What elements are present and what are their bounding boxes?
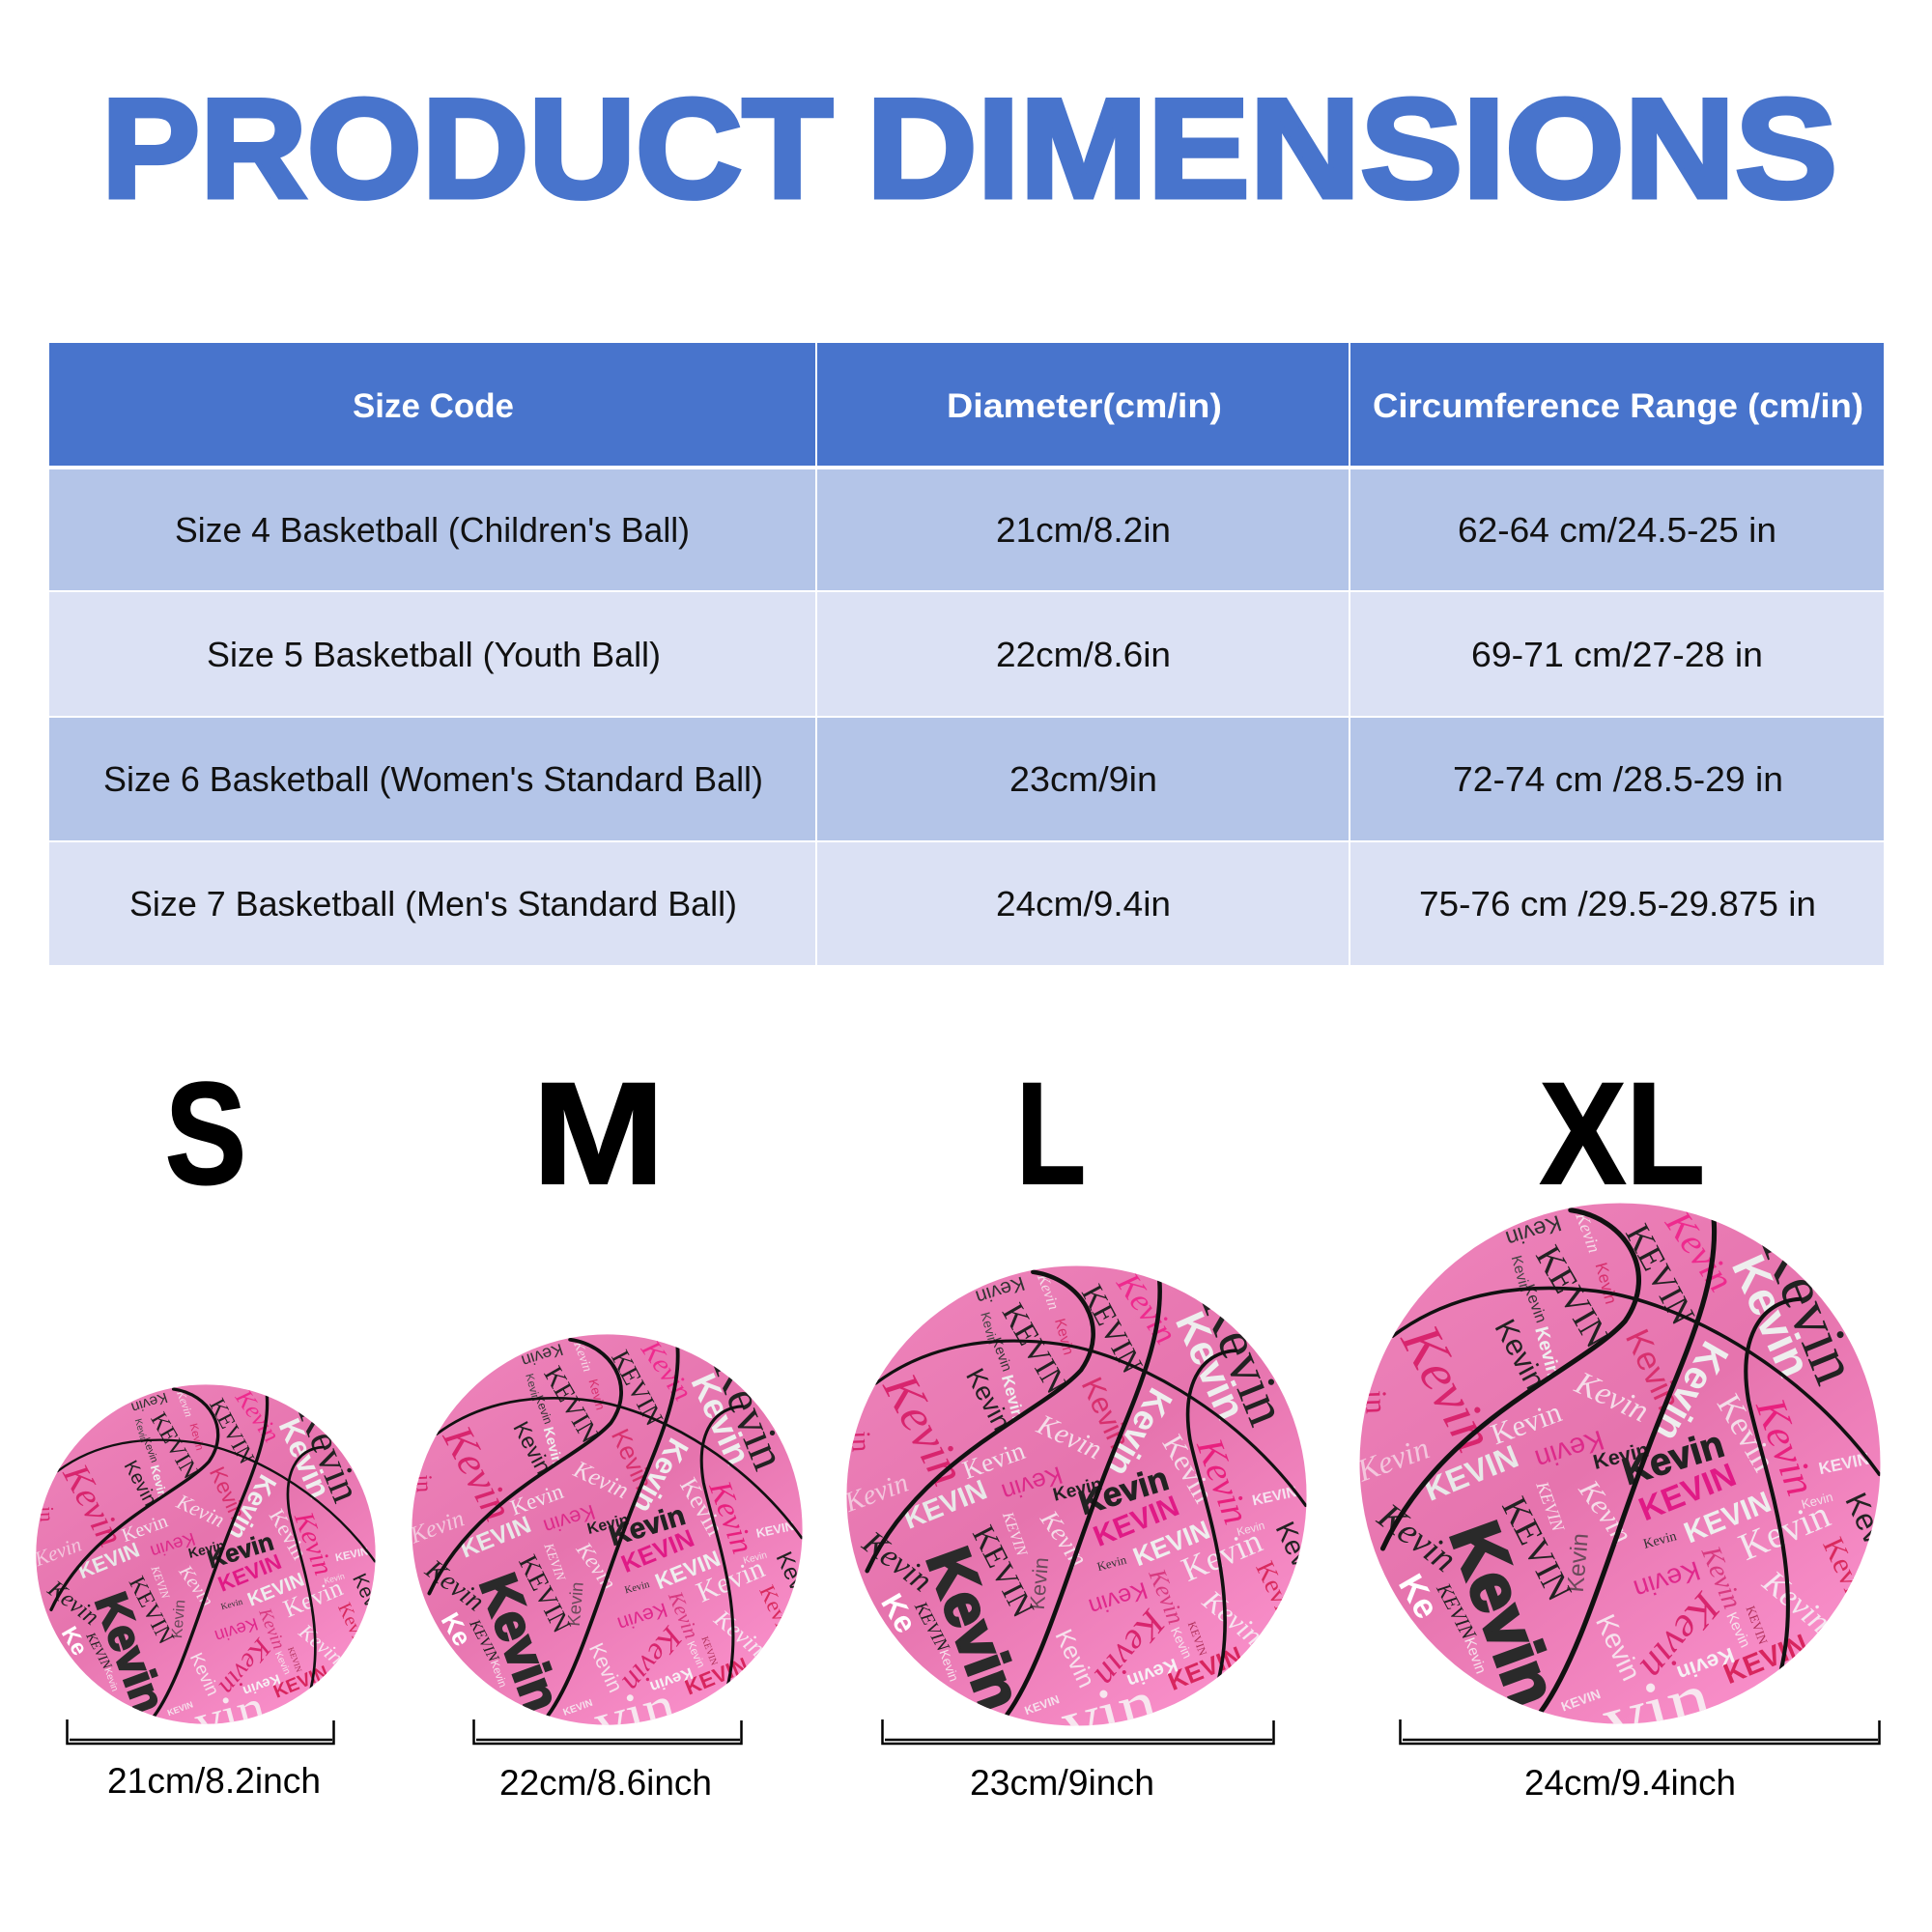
basketball L [846, 1265, 1307, 1725]
basketball L: Kevin [1250, 1557, 1304, 1628]
basketball XL: Kevin [1591, 1438, 1651, 1474]
basketball L: Kevin [1270, 1517, 1325, 1591]
basketball S: Kevin [186, 1537, 226, 1561]
basketball XL: Kevin [1722, 1609, 1753, 1650]
basketball M: Kevin [674, 1473, 729, 1540]
table row: size 4: Size 4 Basketball (Children's Ball) [175, 510, 690, 550]
basketball S: Kevin [333, 1600, 373, 1651]
basketball L: KEVIN [1128, 1514, 1214, 1572]
basketball S: Kevin [132, 1418, 149, 1444]
basketball XL: Kevin [1461, 1635, 1489, 1676]
basketball XL: Kevin [1503, 1210, 1565, 1252]
basketball M: Kevin [626, 1433, 696, 1520]
basketball S: Kevin [348, 1570, 389, 1625]
basketball S: Kevin [31, 1532, 84, 1571]
basketball S: Kevin [86, 1586, 175, 1719]
basketball S: KEVIN [244, 1569, 307, 1611]
dimension bracket S [68, 1719, 334, 1744]
basketball L: KEVIN [899, 1474, 991, 1536]
basketball XL: Kevin [1563, 1532, 1594, 1594]
table header row: Diameter(cm/in) [947, 387, 1222, 425]
basketball S: Kevin [129, 1389, 169, 1416]
basketball XL: Kevin [1747, 1221, 1871, 1393]
basketball L: Kevin [998, 1373, 1028, 1421]
basketball L: Kevin [839, 1467, 912, 1519]
basketball XL: Kevin [1641, 1528, 1678, 1552]
basketball XL: KEVIN [1494, 1491, 1580, 1607]
basketball XL: Kevin [1674, 1643, 1738, 1686]
table row: size 7: 75-76 cm /29.5-29.875 in [1419, 884, 1816, 923]
basketball M: Kevin [692, 1552, 769, 1608]
basketball S: Kevin [241, 1670, 282, 1698]
basketball M: Kevin [541, 1500, 598, 1539]
basketball M: Kevin [708, 1605, 770, 1662]
basketball XL: vin [1593, 1651, 1721, 1769]
basketball M: Kevin [683, 1368, 758, 1471]
basketball S: KEVIN [214, 1549, 285, 1597]
basketball S: KEVIN [148, 1563, 173, 1602]
basketball M: KEVIN [538, 1361, 606, 1448]
basketball S: Kevin [140, 1436, 160, 1464]
basketball S: Kevin [213, 1632, 277, 1701]
basketball S: Kevin [148, 1528, 198, 1561]
basketball L: Kevin [978, 1311, 1000, 1346]
basketball L: Kevin [1032, 1408, 1107, 1465]
basketball L: KEVIN [1023, 1692, 1062, 1718]
basketball S: KEVIN [204, 1395, 259, 1468]
basketball S: KEVIN [74, 1537, 143, 1583]
table row: size 5: 22cm/8.6in [996, 635, 1171, 674]
dimension bracket XL [1401, 1719, 1880, 1744]
basketball S: KEVIN [145, 1408, 203, 1484]
basketball S: Kevin [186, 1422, 205, 1452]
basketball XL: Kevin [1732, 1492, 1836, 1569]
basketball XL: KEVIN [1679, 1485, 1776, 1549]
basketball S: Kevin [272, 1650, 292, 1676]
basketball S [36, 1384, 376, 1724]
basketball XL: Kevin [1721, 1247, 1821, 1385]
basketball M: Kevin [585, 1511, 631, 1538]
basketball M: Kevin [569, 1455, 633, 1504]
basketball XL: Kevin [1572, 1473, 1639, 1549]
basketball M: Kevin [606, 1424, 659, 1493]
basketball XL: Kevin [1710, 1388, 1783, 1478]
basketball M: Kevin [703, 1348, 796, 1477]
size table [49, 343, 1884, 965]
basketball M: KEVIN [681, 1653, 752, 1700]
basketball S: Kevin [101, 1666, 120, 1693]
basketball L: Kevin [1025, 1556, 1053, 1610]
basketball L: KEVIN [999, 1509, 1031, 1559]
basketball M: Kevin [635, 1334, 697, 1406]
size letter XL: XL [1540, 1052, 1705, 1214]
basketball M: vin [587, 1671, 683, 1759]
basketball M: KEVIN [562, 1698, 594, 1719]
basketball L: in [845, 1431, 876, 1453]
basketball L: Kevin [1095, 1552, 1128, 1574]
basketball M [412, 1334, 803, 1725]
dimension label XL: 24cm/9.4inch [1524, 1763, 1736, 1803]
basketball L: Kevin [1177, 1521, 1267, 1589]
basketball M: Ke [436, 1607, 477, 1651]
table row: size 6: 72-74 cm /28.5-29 in [1453, 759, 1783, 799]
basketball S: Kevin [54, 1457, 131, 1553]
basketball L: Kevin [988, 1336, 1014, 1374]
basketball M: Kevin [563, 1581, 587, 1627]
basketball L: Kevin [1075, 1372, 1137, 1454]
basketball XL: Kevin [1631, 1555, 1704, 1605]
basketball M: Kevin [519, 1340, 566, 1371]
basketball XL: KEVIN [1817, 1449, 1871, 1478]
basketball M: Kevin [585, 1378, 608, 1411]
title: PRODUCT [101, 70, 833, 227]
basketball S: Kevin [265, 1505, 312, 1563]
basketball L: Kevin [1086, 1577, 1151, 1620]
basketball L: Kevin [1143, 1564, 1190, 1628]
basketball L: Kevin [1051, 1317, 1076, 1357]
basketball XL: in [1359, 1389, 1393, 1414]
dimension bracket M [473, 1719, 742, 1744]
table row: size 7: 24cm/9.4in [996, 884, 1171, 923]
size letter S: S [165, 1052, 246, 1214]
basketball XL: Kevin [1569, 1365, 1654, 1430]
basketball XL: Kevin [1800, 1490, 1834, 1512]
basketball L: Kevin [1049, 1625, 1100, 1692]
table row: size 5 [49, 592, 1884, 716]
basketball M: Kevin [742, 1550, 768, 1567]
title [101, 70, 1837, 227]
basketball S: Kevin [213, 1614, 261, 1647]
title: DIMENSIONS [867, 70, 1837, 227]
basketball S: vin [188, 1678, 271, 1754]
basketball XL: Kevin [1755, 1563, 1837, 1640]
basketball S: KEVIN [166, 1699, 194, 1718]
basketball S: Kevin [230, 1384, 285, 1447]
basketball L: Kevin [1168, 1625, 1195, 1661]
basketball L: Kevin [958, 1435, 1029, 1485]
basketball XL: Kevin [1816, 1532, 1877, 1612]
basketball XL: Kevin [1352, 1432, 1435, 1490]
basketball S: Kevin [43, 1576, 103, 1631]
basketball S: Kevin [288, 1507, 339, 1579]
basketball M: Kevin [434, 1417, 523, 1528]
basketball L: Kevin [1087, 1602, 1174, 1694]
basketball XL: Kevin [1589, 1610, 1646, 1686]
basketball S: Kevin [186, 1649, 223, 1699]
basketball L: KEVIN [910, 1598, 953, 1656]
basketball S: Kevin [120, 1457, 160, 1510]
basketball S: Kevin [289, 1396, 370, 1509]
basketball L: Kevin [1035, 1504, 1094, 1572]
basketball L: vin [1053, 1662, 1166, 1766]
basketball L: Kevin [1236, 1520, 1266, 1539]
basketball S: KEVIN [270, 1662, 331, 1703]
dimension label L: 23cm/9inch [970, 1763, 1154, 1803]
basketball XL: KEVIN [1618, 1218, 1703, 1331]
basketball XL: Kevin [1520, 1282, 1549, 1325]
basketball M: Kevin [419, 1553, 490, 1617]
table row: size 6: Size 6 Basketball (Women's Standard Ball) [103, 759, 763, 799]
basketball XL: Kevin [1370, 1495, 1463, 1580]
basketball XL: Kevin [1838, 1488, 1902, 1572]
basketball M: Kevin [469, 1567, 571, 1719]
basketball XL: Kevin [1531, 1424, 1607, 1475]
basketball XL: Kevin [1388, 1314, 1507, 1462]
basketball L: Kevin [871, 1364, 976, 1494]
table row: size 5: 69-71 cm/27-28 in [1471, 635, 1763, 674]
size letter M: M [532, 1052, 665, 1214]
basketball S: Kevin [119, 1511, 171, 1547]
basketball XL [1360, 1204, 1880, 1723]
basketball L: Kevin [1109, 1265, 1184, 1350]
basketball L: KEVIN [995, 1297, 1074, 1400]
basketball L: Kevin [1188, 1433, 1258, 1529]
basketball L: Kevin [998, 1461, 1065, 1506]
basketball M: KEVIN [457, 1511, 535, 1564]
basketball S: in [35, 1506, 57, 1523]
basketball M: Kevin [571, 1339, 595, 1374]
basketball XL: Kevin [1487, 1396, 1566, 1451]
basketball M: Kevin [701, 1476, 760, 1558]
basketball L: Kevin [1156, 1429, 1220, 1508]
basketball XL: KEVIN [1419, 1438, 1523, 1509]
basketball S: Kevin [148, 1463, 169, 1499]
basketball M: Kevin [532, 1393, 555, 1426]
basketball S: Kevin [294, 1618, 348, 1669]
basketball L: Kevin [1051, 1474, 1104, 1506]
basketball L: Kevin [1189, 1282, 1299, 1434]
basketball L: Kevin [1166, 1305, 1254, 1427]
table row: size 6: 23cm/9in [1009, 759, 1157, 799]
basketball S: Kevin [169, 1599, 188, 1639]
table row: size 7: Size 7 Basketball (Men's Standard Ball) [129, 884, 737, 923]
basketball M: Kevin [508, 1417, 556, 1478]
table row: size 4 [49, 469, 1884, 590]
basketball S: Kevin [254, 1605, 289, 1652]
basketball L: KEVIN [1075, 1279, 1150, 1378]
basketball XL: KEVIN [1634, 1457, 1742, 1528]
basketball S: Kevin [272, 1413, 338, 1503]
table header row: Size Code [353, 387, 514, 425]
basketball XL: Kevin [1747, 1391, 1825, 1501]
basketball M: Kevin [406, 1505, 468, 1549]
basketball M: Kevin [571, 1537, 622, 1594]
basketball S: Kevin [323, 1571, 346, 1586]
basketball XL: Kevin [1657, 1203, 1742, 1299]
dimension bracket L [883, 1719, 1273, 1744]
basketball L: Kevin [1034, 1271, 1063, 1312]
basketball XL: KEVIN [1559, 1687, 1603, 1715]
basketball XL: Kevin [1435, 1513, 1572, 1716]
basketball S: Kevin [205, 1463, 250, 1522]
basketball XL: Kevin [1695, 1541, 1748, 1613]
basketball M: KEVIN [698, 1635, 719, 1667]
table row: size 5: Size 5 Basketball (Youth Ball) [207, 635, 661, 674]
basketball L: KEVIN [965, 1520, 1040, 1623]
basketball L: Kevin [936, 1648, 961, 1684]
basketball M: KEVIN [651, 1546, 724, 1594]
basketball S: Kevin [279, 1574, 347, 1623]
basketball M: KEVIN [606, 1346, 669, 1431]
basketball XL: KEVIN [1744, 1604, 1771, 1647]
basketball XL: Kevin [1617, 1423, 1729, 1493]
basketball L: Kevin [914, 1539, 1034, 1719]
basketball M: Kevin [754, 1581, 801, 1641]
basketball S: Kevin [220, 1598, 244, 1612]
basketball M: Kevin [684, 1639, 706, 1670]
basketball M: KEVIN [466, 1616, 502, 1665]
basketball M: Kevin [507, 1478, 567, 1520]
basketball L: Kevin [960, 1363, 1017, 1435]
basketball XL: Kevin [1645, 1334, 1738, 1450]
basketball M: in [411, 1474, 437, 1493]
size letter L: L [1016, 1052, 1086, 1214]
basketball L: KEVIN [1164, 1640, 1246, 1696]
basketball XL: Ke [1391, 1568, 1446, 1625]
basketball M: Kevin [614, 1598, 670, 1634]
basketball L: Kevin [855, 1524, 938, 1599]
basketball L: Ke [874, 1587, 924, 1638]
basketball L: Kevin [1098, 1381, 1180, 1484]
basketball XL: KEVIN [1719, 1629, 1812, 1690]
basketball XL: Kevin [1530, 1324, 1564, 1379]
dimension label M: 22cm/8.6inch [499, 1763, 712, 1803]
basketball M: KEVIN [617, 1525, 698, 1578]
basketball L: Kevin [1124, 1654, 1180, 1691]
table row: size 6 [49, 718, 1884, 840]
basketball M: Kevin [488, 1659, 508, 1689]
basketball M: Kevin [523, 1373, 541, 1403]
basketball M: Kevin [664, 1587, 703, 1642]
basketball M: Kevin [615, 1619, 690, 1698]
basketball XL: KEVIN [1532, 1478, 1569, 1535]
table row: size 7 [49, 842, 1884, 965]
basketball L: KEVIN [1251, 1484, 1298, 1509]
basketball M: KEVIN [754, 1519, 795, 1541]
basketball XL: Kevin [1572, 1208, 1605, 1255]
basketball M: Kevin [540, 1426, 564, 1466]
basketball L: Kevin [1196, 1584, 1268, 1652]
basketball S: Kevin [222, 1470, 282, 1546]
basketball S: KEVIN [334, 1546, 369, 1564]
basketball S: KEVIN [82, 1630, 114, 1672]
basketball S: Ke [57, 1622, 93, 1660]
basketball L: Kevin [1075, 1461, 1173, 1522]
basketball S: Kevin [205, 1528, 277, 1574]
basketball S: Kevin [172, 1489, 228, 1532]
basketball M: Kevin [623, 1578, 651, 1596]
table header row [49, 343, 1884, 466]
basketball S: KEVIN [286, 1646, 304, 1674]
basketball XL: KEVIN [1432, 1578, 1481, 1644]
basketball M: KEVIN [541, 1541, 568, 1583]
basketball M: Kevin [584, 1639, 627, 1696]
basketball XL: Kevin [1508, 1254, 1533, 1293]
basketball M: KEVIN [513, 1549, 578, 1637]
basketball M: Kevin [606, 1499, 689, 1552]
table header row: Circumference Range (cm/in) [1373, 387, 1863, 425]
basketball L: KEVIN [1089, 1491, 1183, 1553]
basketball XL: Kevin [1632, 1583, 1730, 1689]
table row: size 4: 21cm/8.2in [996, 510, 1171, 550]
basketball L: KEVIN [1185, 1620, 1209, 1658]
basketball S: Kevin [174, 1561, 217, 1610]
basketball L: Kevin [973, 1272, 1028, 1308]
basketball S: KEVIN [124, 1573, 179, 1648]
basketball S: Kevin [174, 1388, 196, 1419]
basketball XL: Kevin [1488, 1314, 1552, 1395]
dimension label S: 21cm/8.2inch [107, 1761, 321, 1801]
basketball M: Kevin [647, 1663, 696, 1696]
basketball XL: Kevin [1592, 1261, 1621, 1306]
basketball M: Kevin [771, 1548, 818, 1611]
basketball XL: Kevin [1618, 1323, 1687, 1415]
table row: size 4: 62-64 cm/24.5-25 in [1458, 510, 1776, 550]
basketball XL: KEVIN [1528, 1238, 1618, 1354]
